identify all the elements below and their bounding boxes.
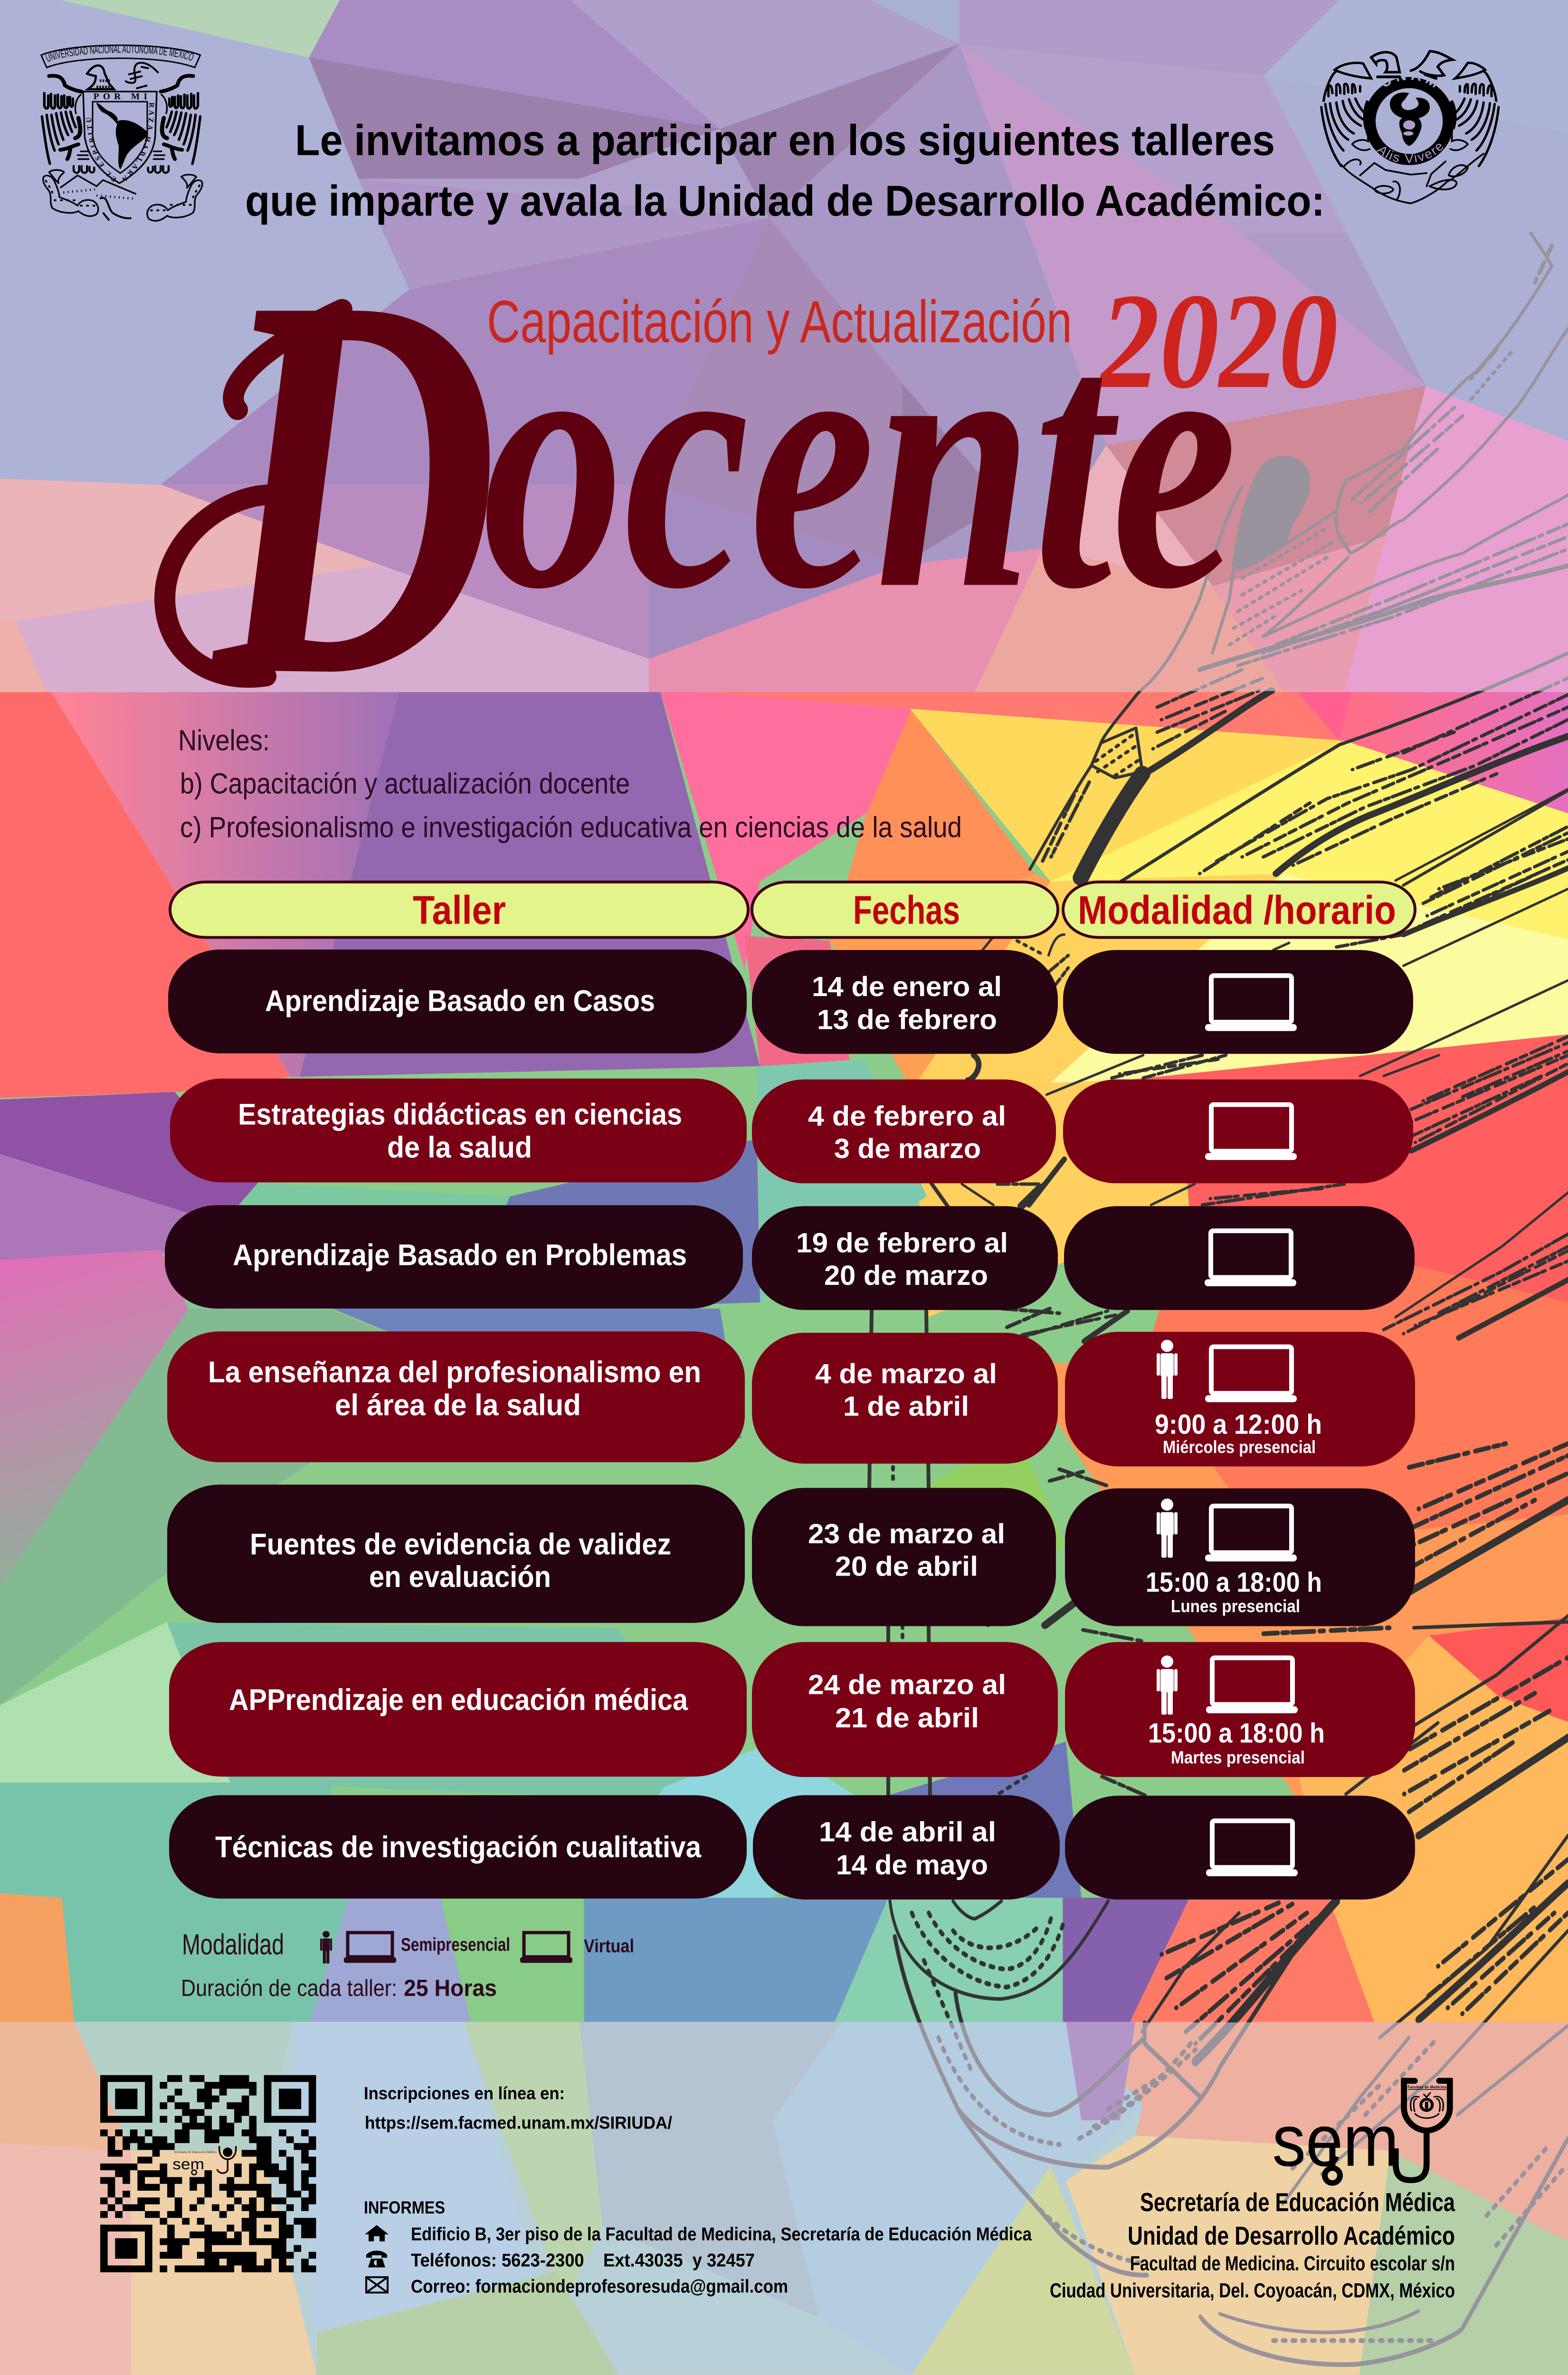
table header: Taller: Taller <box>413 888 506 933</box>
logo: Facultad de Medicina coat of arms: Alis Vivere <box>1375 139 1446 166</box>
text block: informes: Teléfonos: 5623-2300 Ext.43035 y 32457 <box>411 2250 755 2270</box>
row 6: APPrendizaje en educación médica: Martes presencial <box>1171 1748 1305 1767</box>
hand illustration (dark in the central band, faded at top and bottom) <box>869 233 1568 2365</box>
row 1: Aprendizaje Basado en Casos: 13 de febrero <box>817 1004 997 1036</box>
row 1: Aprendizaje Basado en Casos <box>168 950 1413 1054</box>
row 7: Técnicas de investigación cualitativa <box>169 1795 1415 1900</box>
text block: institution address: Secretaría de Educación Médica <box>1140 2187 1455 2217</box>
heading: Capacitación y Actualización: Capacitación y Actualización <box>487 288 1072 355</box>
text block: duración: 25 Horas <box>404 1975 497 2001</box>
row 6: APPrendizaje en educación médica: 15:00 a 18:00 h <box>1148 1717 1325 1748</box>
row 4: La enseñanza del profesionalismo: Miércoles presencial <box>1163 1437 1316 1457</box>
row 2: Estrategias didácticas: Estrategias didácticas en ciencias <box>238 1098 682 1131</box>
row 5: Fuentes de evidencia: 20 de abril <box>835 1550 978 1582</box>
row 6: APPrendizaje en educación médica: 21 de abril <box>835 1702 979 1733</box>
QR code: sem <box>172 2155 204 2173</box>
row 7: Técnicas de investigación cualitativa: 14 de mayo <box>836 1849 988 1881</box>
row 3: Aprendizaje Basado en Problemas: Aprendizaje Basado en Problemas <box>233 1239 687 1272</box>
title: invitation: que imparte y avala la Unidad de Desarrollo Académico: <box>245 177 1325 225</box>
text block: duración: Duración de cada taller: <box>181 1975 397 2001</box>
logo: SEM stethoscope <box>1272 2081 1450 2183</box>
text block: informes: INFORMES <box>364 2197 445 2217</box>
row 4: La enseñanza del profesionalismo <box>167 1331 1415 1466</box>
icon: telephone <box>366 2251 387 2268</box>
QR code <box>100 2075 316 2272</box>
text block: Niveles: b) Capacitación y actualización docente <box>180 768 630 800</box>
text block: institution address: Ciudad Universitaria, Del. Coyoacán, CDMX, México <box>1050 2280 1455 2302</box>
row 4: La enseñanza del profesionalismo: 1 de abril <box>843 1390 969 1422</box>
row 5: Fuentes de evidencia: Fuentes de evidencia de validez <box>250 1528 671 1561</box>
heading: Docente: D <box>208 181 499 789</box>
heading: Docente <box>165 181 1237 789</box>
table header: Fechas <box>752 882 1058 938</box>
legend: Modalidad <box>182 1928 634 1964</box>
logo: Facultad de Medicina coat of arms <box>1321 51 1499 203</box>
title: invitation: Le invitamos a participar en los siguientes talleres <box>295 116 1275 164</box>
icon: home <box>365 2225 389 2242</box>
legend: Modalidad: Semipresencial <box>401 1934 510 1955</box>
logo: UNAM coat of arms: POR MI <box>94 92 147 102</box>
text block: Niveles <box>178 724 962 844</box>
text block: inscripciones <box>364 2083 673 2132</box>
icon: envelope <box>366 2277 388 2292</box>
row 5: Fuentes de evidencia <box>167 1484 1415 1626</box>
row 3: Aprendizaje Basado en Problemas: 20 de marzo <box>824 1259 988 1291</box>
text block: institution address: Unidad de Desarrollo Académico <box>1128 2221 1455 2250</box>
table header: Fechas: Fechas <box>853 888 960 933</box>
row 4: La enseñanza del profesionalismo: La enseñanza del profesionalismo en <box>208 1356 701 1389</box>
logo: UNAM coat of arms: RAZA HABLARA EL ESPIRITU <box>85 103 155 186</box>
logo: Facultad de Medicina coat of arms: UNAM <box>1378 67 1442 91</box>
row 3: Aprendizaje Basado en Problemas <box>165 1205 1415 1310</box>
row 1: Aprendizaje Basado en Casos: 14 de enero al <box>812 971 1002 1002</box>
row 6: APPrendizaje en educación médica: 24 de marzo al <box>808 1669 1006 1700</box>
logo: UNAM coat of arms: UNIVERSIDAD NACIONAL AUTONOMA DE MEXICO <box>44 43 195 64</box>
text block: informes <box>364 2197 1032 2297</box>
text block: inscripciones: https://sem.facmed.unam.mx/SIRIUDA/ <box>365 2113 673 2132</box>
row 4: La enseñanza del profesionalismo: el área de la salud <box>335 1389 581 1422</box>
row 1: Aprendizaje Basado en Casos: Aprendizaje Basado en Casos <box>265 985 655 1017</box>
logo: SEM stethoscope: Facultad de Medicina <box>1407 2085 1447 2090</box>
text block: inscripciones: Inscripciones en línea en: <box>364 2083 565 2103</box>
heading: Docente: ocente <box>482 257 1237 665</box>
text block: Niveles: Niveles: <box>178 724 270 757</box>
row 5: Fuentes de evidencia: en evaluación <box>369 1561 551 1594</box>
legend: Modalidad: Virtual <box>584 1936 634 1957</box>
row 6: APPrendizaje en educación médica: APPrendizaje en educación médica <box>229 1684 688 1717</box>
text block: informes: Correo: formaciondeprofesoresuda@gmail.com <box>411 2276 788 2297</box>
row 4: La enseñanza del profesionalismo: 4 de marzo al <box>815 1358 997 1389</box>
row 6: APPrendizaje en educación médica <box>169 1642 1415 1777</box>
logo: SEM stethoscope: sem <box>1272 2100 1399 2181</box>
row 2: Estrategias didácticas: 3 de marzo <box>834 1133 981 1164</box>
row 5: Fuentes de evidencia: 15:00 a 18:00 h <box>1146 1567 1322 1598</box>
row 2: Estrategias didácticas: de la salud <box>387 1131 532 1164</box>
title: invitation <box>245 116 1325 225</box>
text block: Niveles: c) Profesionalismo e investigación educativa en ciencias de la salud <box>180 811 962 844</box>
text block: informes: Edificio B, 3er piso de la Facultad de Medicina, Secretaría de Educación Médica <box>411 2224 1032 2245</box>
row 5: Fuentes de evidencia: Lunes presencial <box>1171 1596 1300 1616</box>
row 3: Aprendizaje Basado en Problemas: 19 de febrero al <box>796 1227 1008 1258</box>
table header: Taller <box>170 882 748 938</box>
row 2: Estrategias didácticas: 4 de febrero al <box>808 1100 1006 1131</box>
legend: Modalidad: Modalidad <box>182 1928 284 1961</box>
row 7: Técnicas de investigación cualitativa: 14 de abril al <box>819 1816 996 1847</box>
text block: institution address <box>1050 2187 1455 2302</box>
heading: 2020: 2020 <box>1098 265 1338 417</box>
logo: UNAM coat of arms <box>41 43 202 221</box>
row 5: Fuentes de evidencia: 23 de marzo al <box>808 1518 1005 1549</box>
QR code: Secretaría de Educación Médica <box>174 2151 217 2154</box>
row 4: La enseñanza del profesionalismo: 9:00 a 12:00 h <box>1155 1408 1322 1440</box>
row 7: Técnicas de investigación cualitativa: Técnicas de investigación cualitativa <box>215 1831 702 1864</box>
table header: Modalidad /horario: Modalidad /horario <box>1078 888 1396 933</box>
text block: institution address: Facultad de Medicina. Circuito escolar s/n <box>1130 2252 1455 2275</box>
row 2: Estrategias didácticas <box>170 1079 1413 1183</box>
